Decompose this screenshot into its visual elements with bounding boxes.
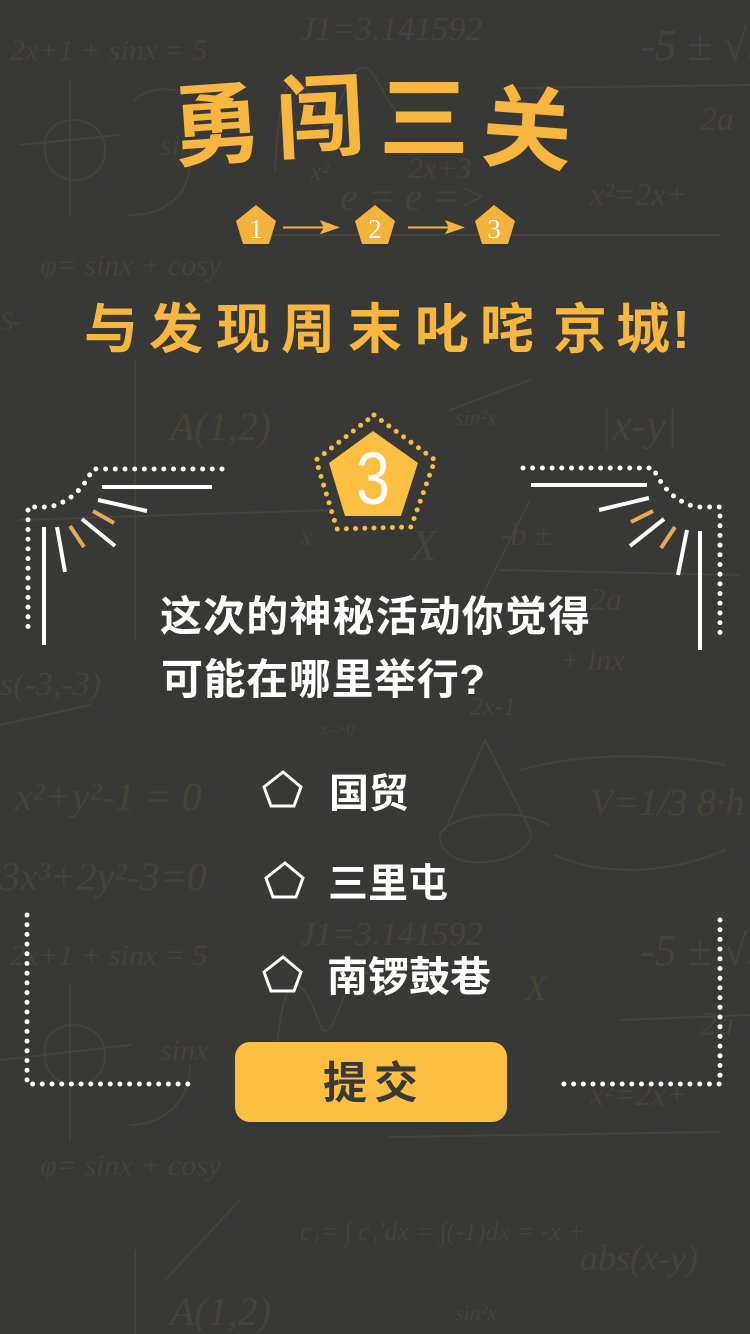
icon: step 2 pentagon: 2 <box>368 214 382 244</box>
chalkboard formulas background: |x-y| <box>600 401 678 450</box>
decoration: bottom left corner frame <box>27 915 190 1084</box>
chalkboard formulas background: x²=2x+ <box>589 1076 687 1112</box>
chalkboard formulas background: J1=3.141592 <box>300 11 483 48</box>
decoration: bottom right corner frame <box>560 920 720 1084</box>
chalkboard formulas background: V=1/3 8·h <box>590 782 744 824</box>
decoration: top right corner frame <box>523 468 720 650</box>
icon: step 3 pentagon <box>475 205 515 244</box>
option: 三里屯: 三里屯 <box>328 862 448 906</box>
icon: step 3 pentagon: 3 <box>487 214 501 244</box>
question text <box>160 593 590 703</box>
chalkboard formulas background: + lnx <box>560 644 625 677</box>
chalkboard formulas background: sin²x <box>455 405 497 430</box>
question text: 这次的神秘活动你觉得 <box>160 593 590 640</box>
arrow: step 1 to 2 <box>283 222 337 232</box>
title: 勇 <box>168 74 265 180</box>
chalkboard formulas background: c₁= ∫ c₁'dx = ∫(-1)dx = -x + <box>300 1217 585 1247</box>
chalkboard formulas background: -b ± <box>500 516 552 552</box>
chalkboard formulas background: φ= sinx + cosy <box>40 1149 222 1182</box>
step indicator <box>236 205 515 244</box>
question text: 可能在哪里举行? <box>161 656 485 703</box>
chalkboard formulas background: 2x+3 <box>408 152 472 185</box>
chalkboard formulas background: abs(x-y) <box>580 1238 698 1278</box>
icon: step 2 pentagon <box>355 205 395 244</box>
icon: step 1 pentagon: 1 <box>249 214 263 244</box>
chalkboard formulas background: 2x+1 + sinx = 5 <box>10 939 207 972</box>
chalkboard formulas background: sinx <box>160 129 209 162</box>
subtitle: 与发现周末叱咤京城! <box>84 300 690 360</box>
chalkboard formulas background: 2x+1 + sinx = 5 <box>10 34 207 67</box>
chalkboard formulas background: x²+y²-1 = 0 <box>14 774 202 819</box>
submit button <box>235 1042 507 1122</box>
chalkboard formulas background: 3x³+2y²-3=0 <box>0 854 207 899</box>
icon: step 1 pentagon <box>236 205 276 244</box>
option: 国贸: 国贸 <box>329 772 409 816</box>
badge: question number 3 <box>316 415 435 529</box>
chalkboard formulas background: X <box>523 968 549 1008</box>
badge: question number 3: 3 <box>356 438 390 520</box>
title: 三 <box>379 70 469 170</box>
option: 南锣鼓巷: 南锣鼓巷 <box>327 954 491 1000</box>
arrow: step 2 to 3 <box>408 222 462 232</box>
chalkboard formulas background: X <box>408 521 439 570</box>
chalkboard formulas background: x² <box>309 157 331 186</box>
chalkboard formulas background: 2a <box>590 581 622 617</box>
chalkboard formulas background: 2a <box>700 101 734 138</box>
chalkboard formulas background: sinx <box>160 1034 209 1067</box>
chalkboard formulas background: x²=2x+ <box>589 176 687 212</box>
chalkboard formulas background: φ= sinx + cosy <box>40 249 222 282</box>
chalkboard formulas background: s(-3,-3) <box>0 666 101 703</box>
chalkboard formulas background: 2x-1 <box>470 692 516 721</box>
chalkboard formulas background: sin²x <box>455 1300 497 1325</box>
chalkboard formulas background: 2a <box>700 1006 734 1043</box>
chalkboard formulas background: J1=3.141592 <box>300 916 483 953</box>
submit button: 提交 <box>323 1059 418 1108</box>
chalkboard formulas background: e = e => <box>340 174 486 219</box>
chalkboard formulas background: S- <box>0 307 22 336</box>
option: 国贸 <box>264 772 409 816</box>
chalkboard formulas background: A(1,2) <box>167 1289 271 1334</box>
option: 三里屯 <box>266 862 448 906</box>
chalkboard formulas background: x->0 <box>319 719 355 739</box>
title: 闯 <box>273 67 368 172</box>
title <box>168 67 575 184</box>
decoration: top left corner frame <box>28 469 222 645</box>
chalkboard formulas background: A(1,2) <box>167 404 271 449</box>
chalkboard formulas background: x <box>299 521 313 552</box>
title: 关 <box>479 78 575 184</box>
